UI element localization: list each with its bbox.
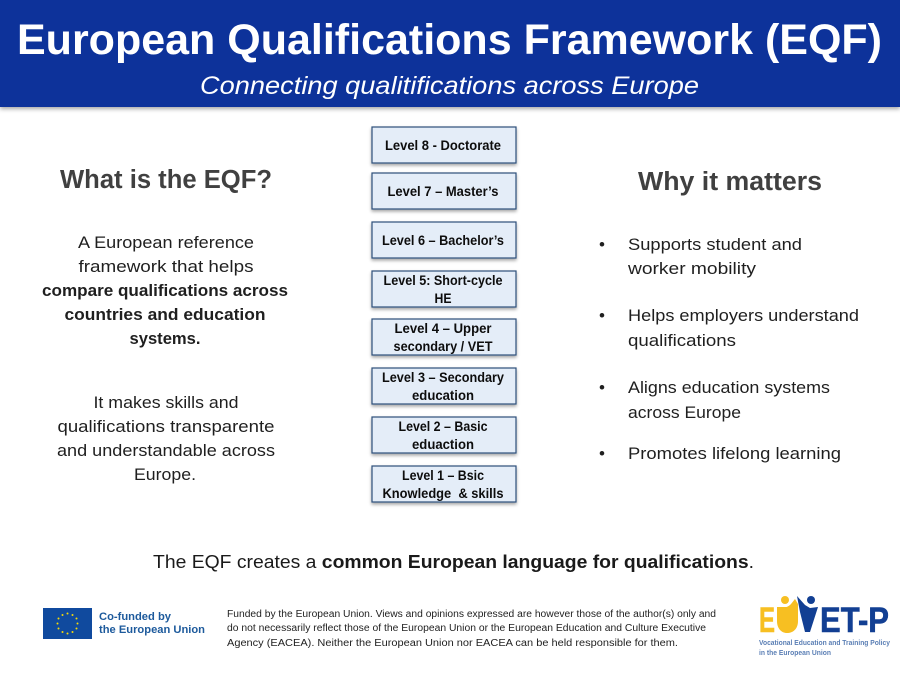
text block: transparency: and understandable across — [57, 441, 275, 460]
bullet: lifelong learning: Promotes lifelong learning — [628, 444, 841, 463]
subtitle: Connecting qualitifications across Europe — [200, 72, 699, 100]
bullet: mobility — [599, 235, 802, 278]
disclaimer — [227, 609, 716, 649]
logo tagline — [759, 638, 891, 657]
level 5: HE — [434, 291, 452, 306]
header banner — [0, 0, 900, 107]
level 4: Level 4 – Upper — [394, 321, 492, 336]
logo tagline: in the European Union — [759, 648, 831, 657]
co-funded label — [99, 611, 205, 636]
bullet: alignment: • — [599, 378, 605, 397]
bullet: alignment: across Europe — [628, 403, 741, 422]
text block: definition: systems. — [130, 329, 200, 348]
level 2: Level 2 – Basic — [398, 419, 488, 434]
level 2: eduaction — [412, 437, 474, 452]
text block: transparency: qualifications transparente — [58, 417, 274, 436]
disclaimer: do not necessarily reflect those of the European Union or the European Education and Culture Executive — [227, 623, 706, 634]
co-funded label: Co-funded by — [99, 611, 172, 623]
heading: why it matters: Why it matters — [638, 168, 822, 196]
logo wordmark — [759, 596, 889, 640]
co-funded by EU logo — [43, 608, 205, 639]
text block: transparency: Europe. — [134, 465, 196, 484]
text block: definition — [42, 233, 288, 348]
bullet: employers: • — [599, 306, 605, 325]
closing statement: The EQF creates a common European language for qualifications . — [153, 552, 754, 572]
level 1 — [372, 466, 516, 502]
level 4: secondary / VET — [394, 339, 493, 354]
text block: transparency — [57, 393, 275, 484]
bullet: employers — [599, 306, 859, 350]
disclaimer: Funded by the European Union. Views and opinions expressed are however those of the author(s) only and — [227, 609, 716, 620]
level 7: Level 7 – Master’s — [388, 184, 498, 199]
level 8 — [372, 127, 516, 163]
chart: EQF level stack — [372, 127, 516, 502]
text block: definition: A European reference — [78, 233, 254, 252]
level 3: education — [412, 388, 474, 403]
level 1: Knowledge & skills — [382, 486, 504, 501]
text block: definition: countries and education — [64, 305, 266, 324]
panel: what is the EQF — [42, 166, 288, 484]
level 3: Level 3 – Secondary — [382, 370, 504, 385]
text block: definition: compare qualifications across — [42, 281, 288, 300]
logo wordmark: ET-P — [820, 601, 889, 640]
level 6: Level 6 – Bachelor’s — [382, 233, 504, 248]
title: European Qualifications Framework (EQF) — [17, 16, 882, 64]
co-funded label: the European Union — [99, 624, 205, 636]
bullet: mobility: Supports student and — [628, 235, 802, 254]
level 8: Level 8 - Doctorate — [385, 138, 501, 153]
bullet list — [599, 235, 859, 463]
text block: definition: framework that helps — [78, 257, 254, 276]
level 7 — [372, 173, 516, 209]
panel: why it matters — [599, 168, 859, 463]
level 5: Level 5: Short-cycle — [384, 273, 503, 288]
bullet: alignment: Aligns education systems — [628, 378, 830, 397]
bullet: alignment — [599, 378, 830, 422]
icon: EU flag — [43, 608, 92, 639]
logo wordmark: E — [759, 601, 775, 640]
level 2 — [372, 417, 516, 453]
level 5 — [372, 271, 516, 307]
level 3 — [372, 368, 516, 404]
disclaimer: Agency (EACEA). Neither the European Union nor EACEA can be held responsible for them. — [227, 638, 678, 649]
heading: what is the EQF: What is the EQF? — [60, 166, 272, 194]
text block: transparency: It makes skills and — [94, 393, 238, 412]
bullet: mobility: worker mobility — [627, 259, 757, 278]
bullet: employers: qualifications — [628, 331, 736, 350]
bullet: lifelong learning: • — [599, 444, 605, 463]
EUVET-P logo — [759, 596, 891, 657]
bullet: employers: Helps employers understand — [628, 306, 859, 325]
level 6 — [372, 222, 516, 258]
level 4 — [372, 319, 516, 355]
level 1: Level 1 – Bsic — [402, 468, 484, 483]
bullet: mobility: • — [599, 235, 605, 254]
